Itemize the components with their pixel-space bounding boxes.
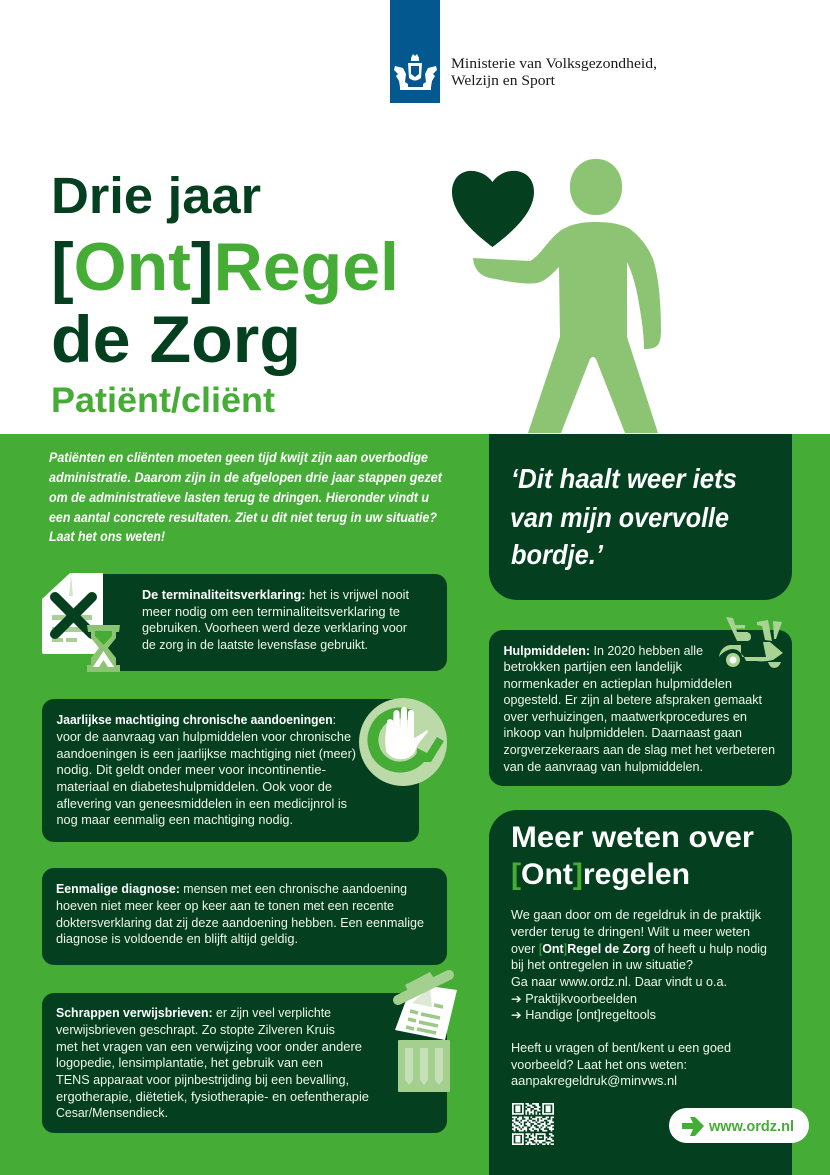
panel: terminaliteitsverklaring: de zorg in de laatste levensfase gebruikt. <box>142 638 368 652</box>
panel: meer weten: We gaan door om de regeldruk in de praktijk <box>511 908 762 922</box>
button: www.ordz.nl: www.ordz.nl <box>708 1119 794 1135</box>
heading: meer weten over ontregelen: Meer weten over <box>511 821 754 854</box>
panel: quote: ‘Dit haalt weer iets <box>511 463 737 494</box>
ministry name: Welzijn en Sport <box>451 73 555 89</box>
panel: schrappen verwijsbrieven <box>42 972 457 1133</box>
intro text: Patiënten en cliënten moeten geen tijd kwijt zijn aan overbodige <box>49 450 428 465</box>
panel: quote <box>489 434 792 600</box>
panel: meer weten: Ga naar www.ordz.nl. Daar vindt u o.a. <box>511 975 727 989</box>
panel: meer weten: aanpakregeldruk@minvws.nl <box>511 1074 677 1088</box>
panel: hulpmiddelen: normenkader en actieplan hulpmiddelen <box>504 677 732 691</box>
panel: schrappen verwijsbrieven: verwijsbrieven geschrapt. Zo stopte Zilveren Kruis <box>56 1023 335 1037</box>
panel: quote: van mijn overvolle <box>510 502 729 533</box>
panel: schrappen verwijsbrieven: Schrappen verwijsbrieven: er zijn veel verplichte <box>56 1006 331 1020</box>
panel: schrappen verwijsbrieven: Cesar/Mensendieck. <box>56 1106 168 1120</box>
panel: hulpmiddelen <box>489 617 792 786</box>
panel: jaarlijkse machtiging: aflevering van geneesmiddelen in een medicijnrol is <box>56 797 347 811</box>
icon: person figure <box>473 159 661 433</box>
panel: jaarlijkse machtiging: nog maar eenmalig een machtiging nodig. <box>56 813 293 827</box>
logo: Rijksoverheid blue ribbon with emblem <box>390 0 440 103</box>
panel: terminaliteitsverklaring: meer nodig om een terminaliteitsverklaring te <box>142 605 400 619</box>
panel: terminaliteitsverklaring: gebruiken. Voorheen werd deze verklaring voor <box>142 621 407 635</box>
panel: eenmalige diagnose: Eenmalige diagnose: mensen met een chronische aandoening <box>56 882 407 896</box>
intro text: een aantal concrete resultaten. Ziet u dit niet terug in uw situatie? <box>49 510 437 525</box>
panel: hulpmiddelen: zorgverzekeraars aan de slag met het verbeteren <box>504 743 775 757</box>
panel: eenmalige diagnose: diagnose is voldoende en blijft altijd geldig. <box>56 932 298 946</box>
title: [Ont]Regel <box>51 229 399 305</box>
panel: jaarlijkse machtiging: materiaal en diabeteshulpmiddelen. Ook voor de <box>56 780 332 794</box>
intro text: administratie. Daarom zijn in de afgelopen drie jaar stappen gezet <box>49 470 442 485</box>
intro text: om de administratieve lasten terug te dringen. Hieronder vindt u <box>49 490 430 505</box>
panel: meer weten: Heeft u vragen of bent/kent u een goed <box>511 1041 731 1055</box>
ministry name <box>451 56 657 89</box>
icon: heart <box>452 171 534 247</box>
panel: hulpmiddelen: inkoop van hulpmiddelen. Daarnaast gaan <box>504 726 742 740</box>
panel: terminaliteitsverklaring <box>42 573 447 672</box>
panel: eenmalige diagnose: hoeven niet meer keer op keer aan te tonen met een recente <box>56 899 394 913</box>
panel: jaarlijkse machtiging: nodig. Dit geldt onder meer voor incontinentie- <box>56 763 326 777</box>
panel: schrappen verwijsbrieven: ergotherapie, diëtetiek, fysiotherapie- en oefentherapie <box>56 1090 369 1104</box>
panel: jaarlijkse machtiging: voor de aanvraag van hulpmiddelen voor chronische <box>56 730 351 744</box>
title: de Zorg <box>51 302 301 376</box>
title: Patiënt/cliënt <box>51 381 275 420</box>
panel: terminaliteitsverklaring: De terminaliteitsverklaring: het is vrijwel nooit <box>142 588 410 602</box>
panel: jaarlijkse machtiging: Jaarlijkse machtiging chronische aandoeningen: <box>56 713 336 727</box>
panel: meer weten: verder terug te dringen! Wilt u meer weten <box>511 925 750 939</box>
panel: meer weten: ➔ Handige [ont]regeltools <box>511 1008 656 1022</box>
panel: eenmalige diagnose: doktersverklaring dat zij deze aandoening hebben. Een eenmalige <box>56 916 424 930</box>
intro text: Laat het ons weten! <box>49 529 165 544</box>
button: www.ordz.nl <box>669 1108 809 1143</box>
panel: hulpmiddelen: van de aanvraag van hulpmiddelen. <box>504 760 703 774</box>
icon: arrow <box>682 1117 704 1136</box>
title <box>51 167 399 420</box>
panel: schrappen verwijsbrieven: TENS apparaat voor pijnbestrijding bij een bevalling, <box>56 1073 349 1087</box>
icon: document with cross and hourglass <box>42 573 120 672</box>
panel: meer weten <box>489 810 792 1175</box>
panel: schrappen verwijsbrieven: met het vragen van een verwijzing voor onder andere <box>56 1040 362 1054</box>
panel: jaarlijkse machtiging: aandoeningen is een jaarlijkse machtiging niet (meer) <box>56 747 356 761</box>
title: Drie jaar <box>51 167 261 224</box>
panel: schrappen verwijsbrieven: logopedie, lensimplantatie, het gebruik van een <box>56 1056 323 1070</box>
panel: hulpmiddelen: opgesteld. Er zijn al betere afspraken gemaakt <box>504 693 763 707</box>
panel: hulpmiddelen: betrokken partijen een landelijk <box>504 660 683 674</box>
icon: QR code <box>512 1104 554 1144</box>
panel: meer weten: over [Ont]Regel de Zorg of heeft u hulp nodig <box>511 942 767 956</box>
icon: hand in circular arrow <box>359 698 447 786</box>
panel: meer weten: voorbeeld? Laat het ons weten: <box>511 1058 687 1072</box>
intro text <box>49 450 442 544</box>
panel: meer weten: ➔ Praktijkvoorbeelden <box>511 992 637 1006</box>
panel: quote: bordje.’ <box>511 539 604 570</box>
panel: jaarlijkse machtiging <box>42 698 447 842</box>
panel: hulpmiddelen: Hulpmiddelen: In 2020 hebben alle <box>504 644 703 658</box>
icon: paper in trash bin <box>395 972 457 1092</box>
green background section <box>0 434 830 1175</box>
ministry name: Ministerie van Volksgezondheid, <box>451 56 657 72</box>
heading: meer weten over ontregelen <box>511 821 754 891</box>
icon: mobility scooter <box>719 617 783 669</box>
panel: hulpmiddelen: over verhuizingen, maatwerkprocedures en <box>504 710 747 724</box>
panel: eenmalige diagnose <box>42 868 447 965</box>
heading: meer weten over ontregelen: [Ont]regelen <box>511 858 690 891</box>
panel: meer weten: bij het ontregelen in uw situatie? <box>511 958 693 972</box>
